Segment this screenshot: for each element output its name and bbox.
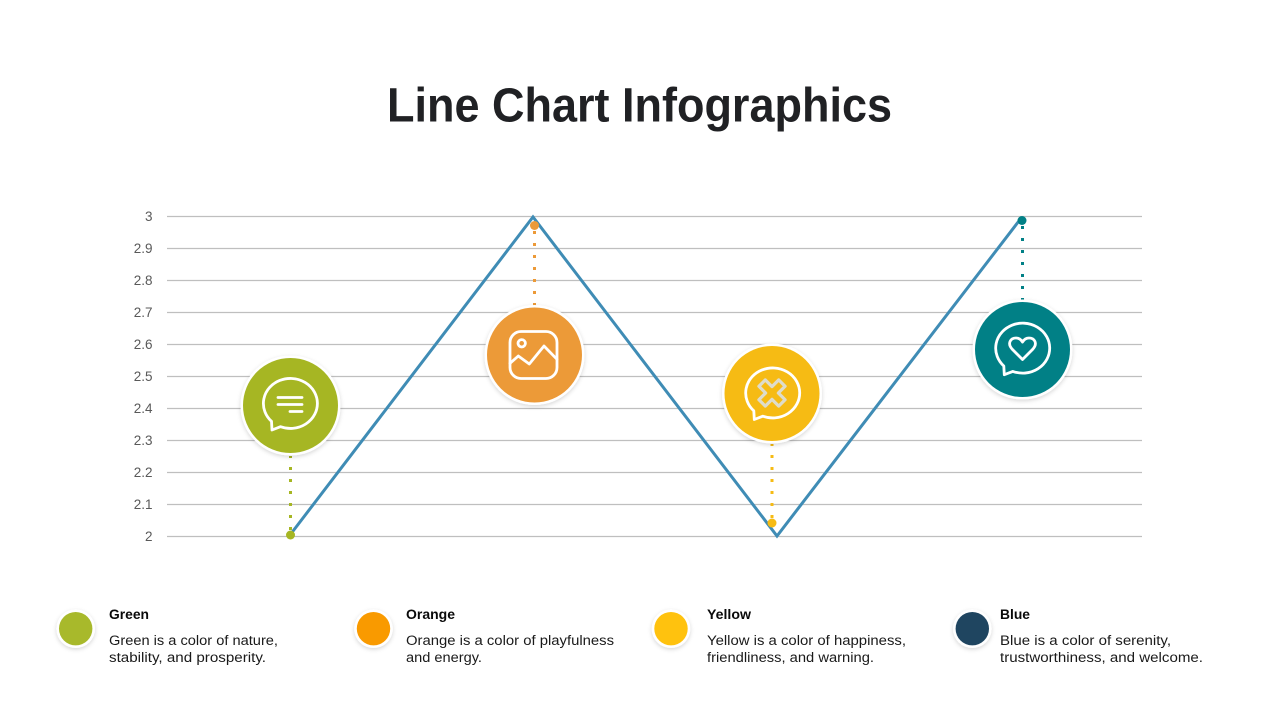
legend: green: stability, and prosperity. [109, 650, 266, 666]
y axis labels: 2.4 [134, 401, 153, 416]
legend: orange: and energy. [406, 650, 482, 666]
y axis labels [134, 209, 153, 544]
legend: green: Green is a color of nature, [109, 633, 278, 649]
icon: teal chat with heart [972, 300, 1072, 400]
y axis labels: 2.2 [134, 465, 152, 480]
y axis labels: 2.7 [134, 305, 152, 320]
y axis labels: 2.6 [134, 337, 152, 352]
marker: yellow [768, 444, 776, 528]
legend: yellow: friendliness, and warning. [707, 650, 874, 666]
icon: yellow chat with cross [722, 344, 822, 444]
legend: green: Green [109, 606, 149, 622]
legend: blue: trustworthiness, and welcome. [1000, 650, 1203, 666]
title: Line Chart Infographics [387, 80, 892, 132]
legend: yellow: Yellow is a color of happiness, [707, 633, 906, 649]
line chart [134, 209, 1142, 544]
legend: yellow: Yellow [707, 606, 751, 622]
marker: teal [1018, 216, 1026, 301]
legend: orange: Orange [406, 606, 455, 622]
y axis labels: 2.5 [134, 369, 152, 384]
y axis labels: 3 [145, 209, 152, 224]
legend: orange [354, 606, 614, 666]
legend: orange: Orange is a color of playfulness [406, 633, 614, 649]
icon: green chat with lines [240, 356, 340, 456]
y axis labels: 2.8 [134, 273, 152, 288]
legend: blue: Blue is a color of serenity, [1000, 633, 1171, 649]
marker: orange [530, 221, 539, 306]
legend: blue [953, 606, 1203, 666]
legend: blue: Blue [1000, 606, 1030, 622]
legend: green [56, 606, 278, 666]
y axis labels: 2.1 [134, 497, 152, 512]
y axis labels: 2 [145, 529, 152, 544]
y axis labels: 2.3 [134, 433, 152, 448]
icon: orange image [484, 305, 584, 405]
y axis labels: 2.9 [134, 241, 152, 256]
marker: green [286, 456, 295, 540]
legend: yellow [652, 606, 906, 666]
data line [290, 217, 1022, 536]
